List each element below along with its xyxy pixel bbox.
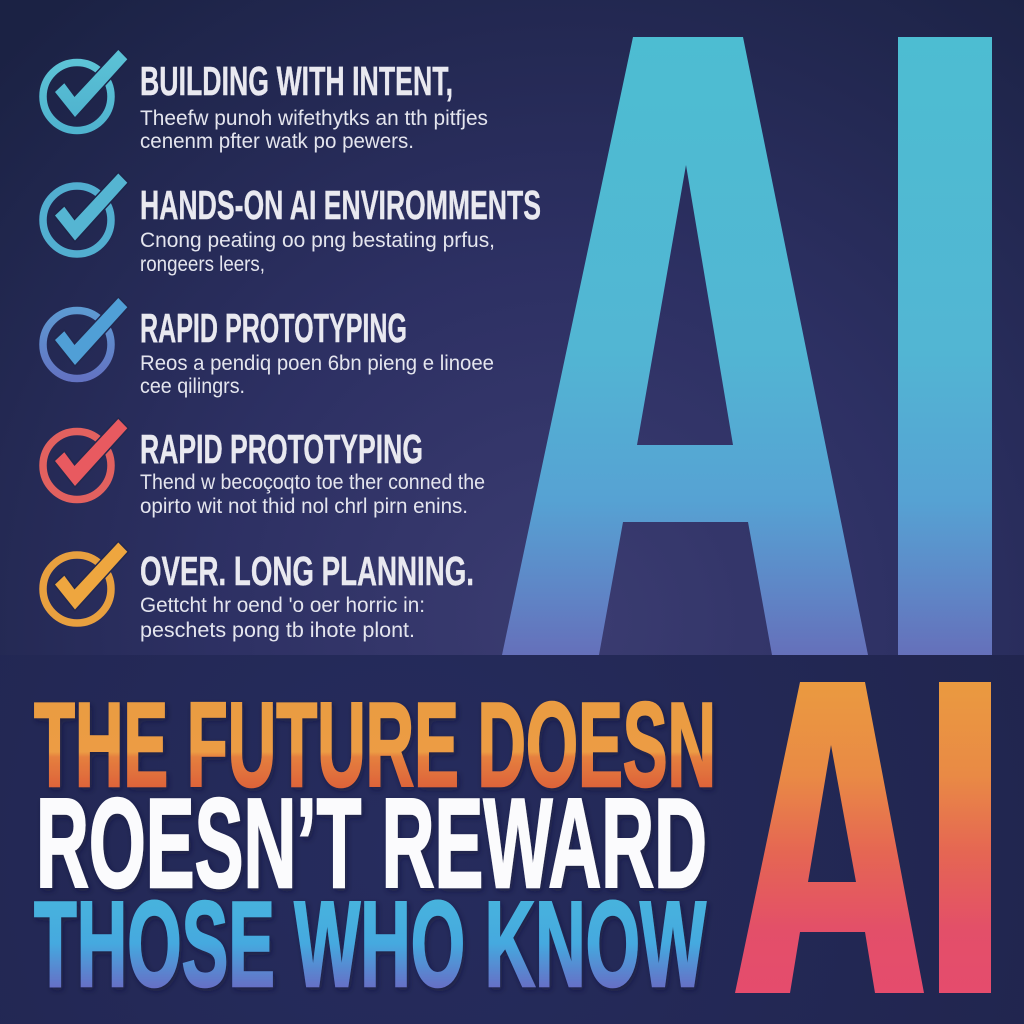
heading 2: HANDS-ON AI ENVIROMMENTS: [140, 182, 541, 228]
description 5: [140, 594, 425, 642]
checklist item 1: [43, 50, 488, 153]
background: lower panel: [0, 655, 1024, 1024]
description 2: rongeers leers,: [140, 253, 265, 276]
checklist item 3: [43, 298, 494, 398]
background: upper panel: [0, 0, 1024, 655]
checklist item 2: [43, 174, 541, 276]
description 2: Cnong peating oo png bestating prfus,: [140, 229, 495, 252]
heading 5: OVER. LONG PLANNING.: [140, 548, 474, 594]
description 4: Thend w becoçoqto toe ther conned the: [140, 471, 485, 494]
heading 3: RAPID PROTOTYPING: [140, 305, 407, 351]
icon: red check circle: [43, 419, 127, 500]
icon: teal check circle: [43, 50, 127, 130]
icon: blue-teal check circle: [43, 174, 127, 254]
heading 4: RAPID PROTOTYPING: [140, 426, 423, 472]
heading 1: BUILDING WITH INTENT,: [140, 58, 453, 104]
description 2: [140, 229, 495, 276]
checklist item 4: [43, 419, 485, 518]
large AI lettering: [502, 37, 992, 655]
description 1: Theefw punoh wifethytks an tth pitfjes: [140, 107, 488, 130]
description 3: cee qilingrs.: [140, 375, 245, 398]
description 3: [140, 352, 494, 398]
description 5: Gettcht hr oend 'o oer horric in:: [140, 594, 425, 617]
description 3: Reos a pendiq poen 6bn pieng e linoee: [140, 352, 494, 375]
icon: indigo check circle: [43, 298, 127, 378]
small AI lettering: [735, 682, 991, 993]
checklist item 5: [43, 542, 474, 642]
description 5: peschets pong tb ihote plont.: [140, 619, 415, 642]
description 1: cenenm pfter watk po pewers.: [140, 130, 414, 153]
headline: [34, 678, 716, 1012]
description 4: opirto wit not thid nol chrl pirn enins.: [140, 495, 468, 518]
description 1: [140, 107, 488, 153]
icon: orange check circle: [43, 542, 127, 623]
description 4: [140, 471, 485, 518]
